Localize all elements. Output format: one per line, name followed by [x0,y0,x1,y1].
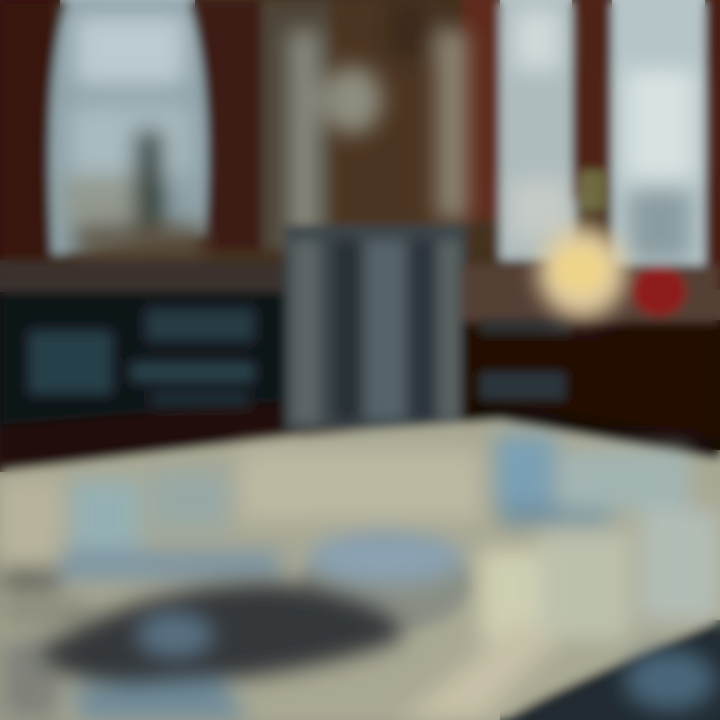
bowl [300,532,470,633]
marble counter [0,420,720,720]
central appliance [285,225,465,430]
dark corner bottom right [505,620,720,720]
dark reflection on counter [40,583,402,720]
red glass [632,266,686,316]
candle glow [538,226,626,318]
right window detail [510,10,695,260]
left window [49,0,208,255]
upper wall and windows [0,0,720,290]
center pale column [288,0,466,250]
dark cabinet right [462,265,720,465]
dark cabinet left [0,262,320,475]
